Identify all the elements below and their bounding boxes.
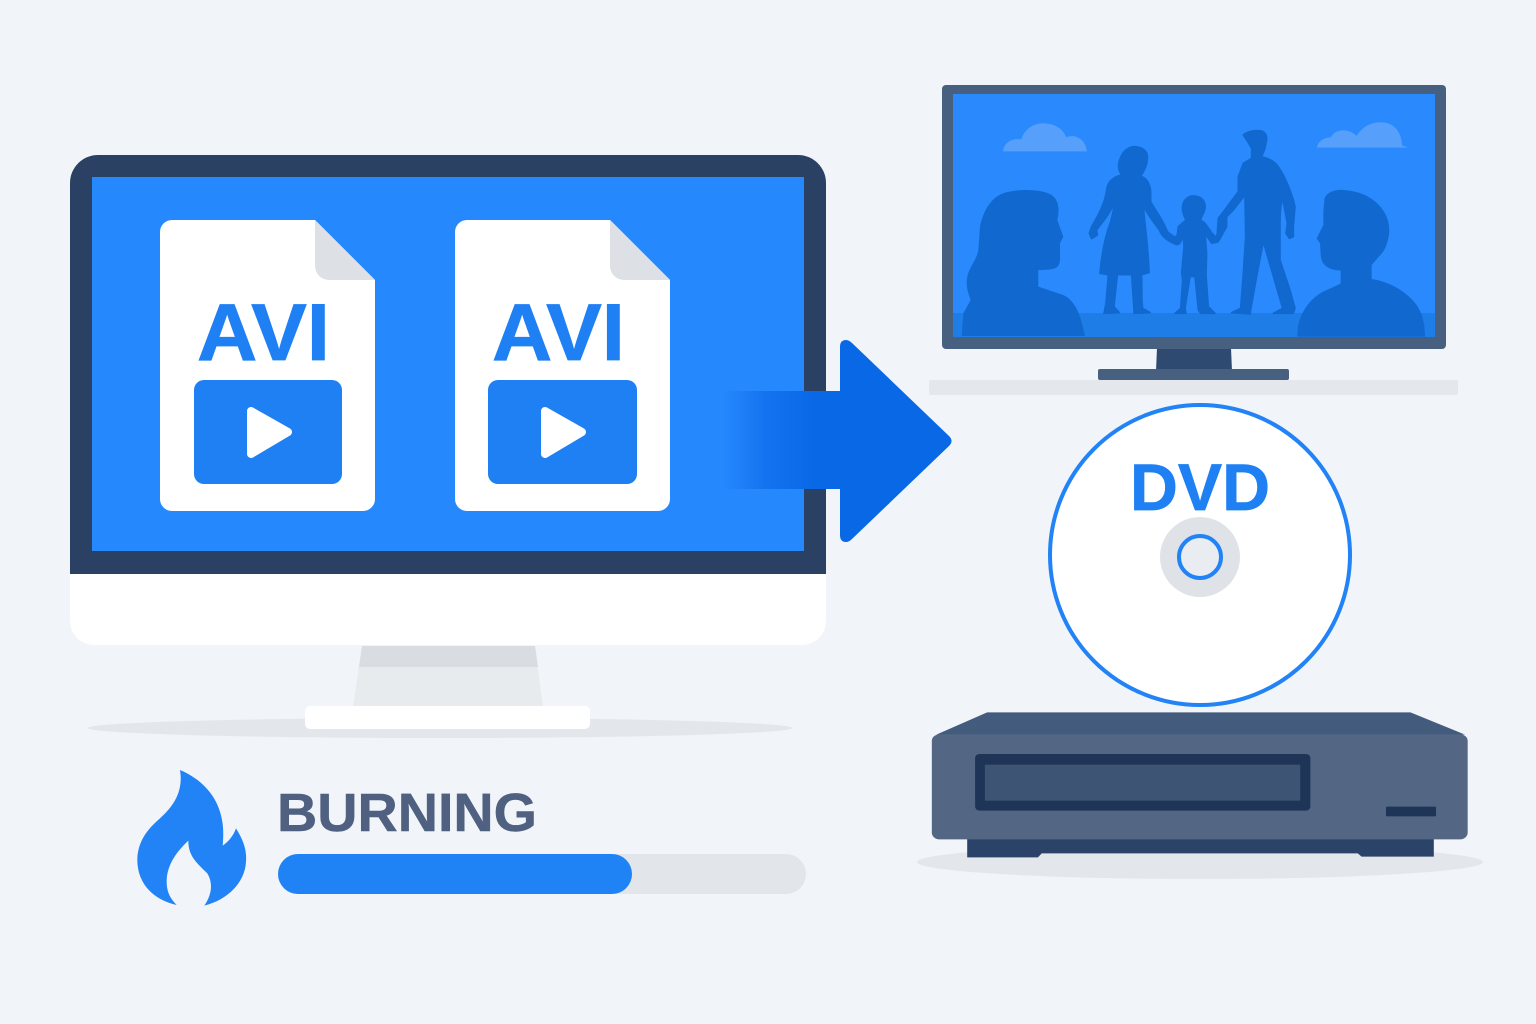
file icon: AVI left [160, 220, 375, 511]
video box left [194, 380, 342, 484]
tv screen [953, 94, 1435, 337]
panel: DVD player [917, 712, 1483, 879]
video box right [488, 380, 637, 484]
DVD label: DVD [1130, 450, 1270, 524]
tv scene [953, 122, 1435, 337]
child [1173, 196, 1222, 313]
ground [953, 313, 1435, 337]
panel: burning progress [137, 770, 806, 906]
viewer right [1297, 190, 1425, 337]
AVI label left: AVI [197, 288, 330, 378]
monitor chin [70, 570, 826, 645]
file icon: AVI right [455, 220, 670, 511]
disc [1050, 405, 1350, 705]
player feet [967, 837, 1434, 857]
player shadow [917, 845, 1483, 879]
clouds [1003, 122, 1408, 151]
monitor stand [305, 646, 590, 729]
progress bar [278, 854, 806, 894]
player top [936, 712, 1465, 735]
panel: desktop computer monitor [70, 155, 826, 738]
player body [932, 734, 1468, 839]
AVI label right: AVI [492, 288, 625, 378]
monitor frame [70, 155, 826, 574]
monitor screen [92, 177, 804, 551]
family silhouette [1089, 131, 1295, 314]
icon: flame [137, 770, 246, 906]
arrow: AVI to DVD [722, 340, 952, 542]
burning label: BURNING [277, 783, 537, 843]
tv stand [1098, 348, 1289, 380]
disc hub [1160, 517, 1240, 597]
tv frame [942, 85, 1446, 349]
front slot [1386, 807, 1436, 816]
panel: DVD disc [1050, 405, 1350, 705]
disc tray [975, 754, 1310, 811]
father [1215, 131, 1295, 314]
tv shelf [929, 380, 1458, 395]
panel: television [929, 85, 1458, 395]
viewer left [962, 190, 1085, 336]
monitor shadow [88, 718, 792, 738]
mother [1089, 147, 1177, 313]
